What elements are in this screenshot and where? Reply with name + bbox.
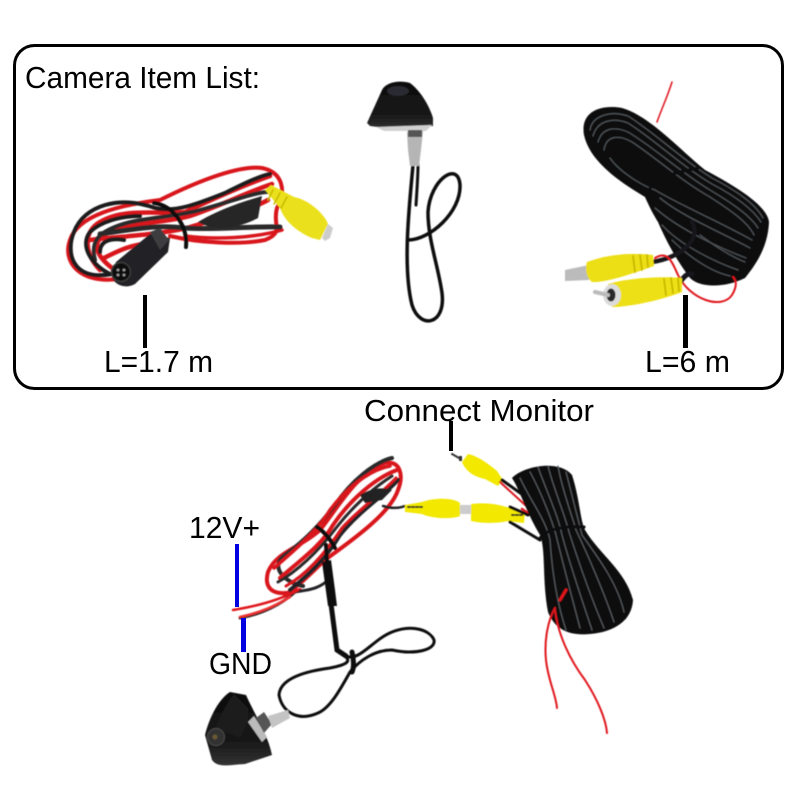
panel: camera item list: [14, 46, 782, 388]
RCA plugs: [383, 454, 540, 540]
RCA plugs: [565, 254, 682, 307]
label bar: long cable: [683, 295, 688, 348]
long coil cable: [565, 82, 769, 307]
title: Camera Item List:: [25, 60, 260, 95]
label: 12V+: 12V+: [189, 510, 260, 545]
label: GND: GND: [209, 646, 272, 681]
thin camera cable: [407, 165, 460, 321]
bottom camera: [205, 692, 290, 765]
label: L=1.7 m: L=1.7 m: [104, 344, 213, 379]
label bar: short cable: [143, 295, 147, 348]
label: connect monitor: Connect Monitor: [364, 393, 594, 428]
4-pin connector: [112, 228, 170, 286]
blue bar: GND: [241, 618, 246, 652]
label: L=6 m: L=6 m: [645, 344, 730, 379]
red wire end: [657, 82, 672, 122]
red and black power wire bundle: [233, 458, 401, 618]
blue bar: 12V+: [235, 544, 239, 607]
cable tie: [317, 527, 335, 548]
assembled kit photo: [205, 454, 633, 765]
camera body: [367, 82, 433, 166]
red and black wire loops: [68, 168, 282, 280]
inline connector: [322, 545, 346, 656]
camera lead loop: [279, 628, 434, 716]
yellow RCA plug: [265, 185, 333, 241]
camera with lead: [367, 82, 460, 321]
black lead and red wire: [652, 222, 694, 262]
coil bundle: [583, 107, 769, 286]
cable tie: [154, 203, 186, 247]
red wire ends: [545, 608, 557, 708]
long coil bundle: [512, 466, 633, 634]
leader bar: connect monitor: [449, 421, 453, 451]
short power and video cable: [68, 168, 333, 286]
